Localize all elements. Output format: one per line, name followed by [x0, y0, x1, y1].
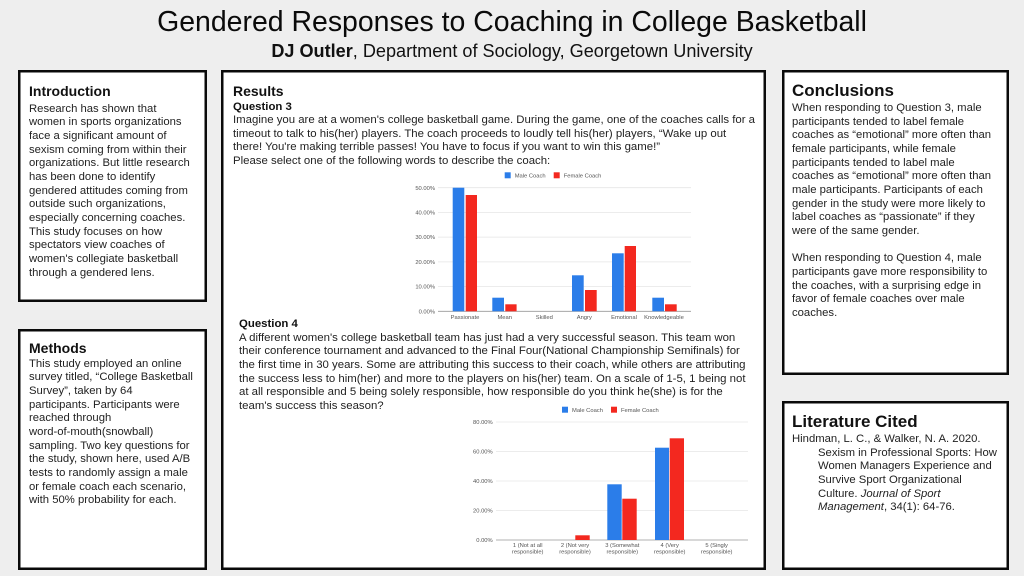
text: methods body: participants. Participants were: [29, 399, 180, 411]
text: introduction body: organizations. But little research: [29, 157, 190, 169]
text: citation: Culture. Journal of Sport: [818, 488, 940, 500]
text: question 3 prompt: there! You're making terrible passes! You have to focus if you want to win this game!”: [233, 141, 660, 153]
text: methods body: survey titled, “College Basketball: [29, 371, 193, 383]
y axis labels: 40.00%: [415, 210, 435, 216]
text: introduction body: spectators view coaches of: [29, 239, 165, 251]
text: conclusions body: female participants, while female: [792, 143, 956, 155]
y axis labels: [473, 420, 493, 544]
text: question 4 prompt: the success less to him(her) and more to the players on his(her) team. On a scale of 1-5, 1 being not: [239, 373, 746, 385]
panel: methods: [18, 329, 207, 570]
category labels: responsible): [512, 549, 544, 555]
text: conclusions body: male participants. Participants of each: [792, 184, 983, 196]
category labels: 3 (Somewhat: [605, 543, 640, 549]
category labels: 5 (Singly: [705, 543, 728, 549]
category labels: responsible): [559, 549, 591, 555]
female coach bars: [575, 438, 684, 540]
text: question 4 prompt: the first time in 30 years. Some are attributing this success to their coach, while others are attributing: [239, 359, 746, 371]
chart legend: Male Coach: [572, 408, 603, 414]
author and affiliation: DJ Outler, Department of Sociology, Georgetown University: [271, 41, 753, 61]
text: methods body: with 50% probability for each.: [29, 494, 177, 506]
text: citation: [792, 433, 997, 513]
y axis labels: 0.00%: [419, 309, 435, 315]
text: question 4 prompt: A different women's college basketball team has just had a very successful season. This team won: [239, 332, 735, 344]
text: introduction body: through a gendered lens.: [29, 267, 155, 279]
panel: results: [221, 70, 766, 570]
text: question 3 prompt: [233, 114, 755, 167]
text: conclusions body: the coaches, with a surprising edge in: [792, 280, 981, 292]
text: introduction body: gendered attitudes coming from: [29, 185, 188, 197]
category labels: Angry: [577, 315, 592, 321]
y axis labels: 0.00%: [476, 538, 493, 544]
category labels: [512, 543, 733, 555]
text: methods body: sampling. Two key questions for: [29, 440, 190, 452]
heading: results: Results: [233, 83, 284, 99]
text: conclusions body: participants tended to label female: [792, 116, 964, 128]
category labels: Passionate: [451, 315, 479, 321]
text: question 4 prompt: at all responsible and 5 being solely responsible, how responsible do you think he(she) is for the: [239, 386, 723, 398]
text: methods body: reached through: [29, 412, 111, 424]
text: question 3 prompt: Imagine you are at a women's college basketball game. During the game, one of the coaches calls for a: [233, 114, 755, 126]
y axis labels: 20.00%: [473, 509, 493, 515]
text: question 4 prompt: their conference tournament and advanced to the Final Four(National Championship Semifinals) for: [239, 345, 740, 357]
text: introduction body: women in sports organizations: [29, 116, 182, 128]
heading: conclusions: Conclusions: [792, 81, 894, 100]
chart legend: Female Coach: [564, 173, 601, 179]
category labels: Emotional: [611, 315, 637, 321]
text: conclusions body: gender in the study were more likely to: [792, 198, 985, 210]
male coach bars: [453, 188, 664, 311]
category labels: Mean: [497, 315, 512, 321]
text: introduction body: outside such organizations,: [29, 198, 166, 210]
text: conclusions body: coaches as “emotional” more often than: [792, 129, 991, 141]
text: citation: Hindman, L. C., & Walker, N. A. 2020.: [792, 433, 981, 445]
male coach bars: [607, 448, 669, 540]
gridlines and axis: [496, 422, 748, 540]
text: conclusions body: coaches.: [792, 307, 837, 319]
text: introduction body: especially concerning coaches.: [29, 212, 185, 224]
text: methods body: the study, shown here, used A/B: [29, 453, 190, 465]
panel: conclusions: [782, 70, 1009, 375]
category labels: Knowledgeable: [644, 315, 684, 321]
text: question 4 prompt: team's success this season?: [239, 400, 384, 412]
text: introduction body: sexism coming from within their: [29, 144, 187, 156]
category labels: responsible): [607, 549, 638, 555]
y axis labels: 80.00%: [473, 420, 493, 426]
text: introduction body: has been done to identify: [29, 171, 155, 183]
text: conclusions body: participants gave more responsibility to: [792, 266, 987, 278]
chart legend: Female Coach: [621, 408, 659, 414]
text: introduction body: face a significant amount of: [29, 130, 167, 142]
text: citation: Management, 34(1): 64-76.: [818, 501, 955, 513]
text: methods body: Survey”, taken by 64: [29, 385, 133, 397]
text: conclusions body: favor of female coaches over male: [792, 293, 965, 305]
chart legend: [505, 172, 601, 179]
bar chart: question 3 word choice by coach gender: [415, 172, 691, 321]
heading: question 3: Question 3: [233, 101, 292, 113]
heading: literature cited: Literature Cited: [792, 412, 918, 431]
text: conclusions body: When responding to Question 3, male: [792, 102, 982, 114]
text: citation: Survive Sport Organizational: [818, 474, 962, 486]
text: question 4 prompt: [239, 332, 746, 412]
text: citation: Sexism in Professional Sports: How: [818, 447, 997, 459]
heading: methods: Methods: [29, 340, 87, 356]
y axis labels: 30.00%: [415, 235, 435, 241]
text: methods body: word-of-mouth(snowball): [29, 426, 153, 438]
text: methods body: or female coach each scenario,: [29, 481, 186, 493]
y axis labels: 40.00%: [473, 479, 493, 485]
text: conclusions body: When responding to Question 4, male: [792, 252, 982, 264]
category labels: 1 (Not at all: [513, 543, 543, 549]
y axis labels: 20.00%: [415, 260, 435, 266]
category labels: [451, 315, 684, 321]
text: conclusions body: [792, 102, 991, 319]
y axis labels: 10.00%: [415, 285, 435, 291]
text: introduction body: [29, 102, 190, 279]
text: methods body: tests to randomly assign a male: [29, 467, 188, 479]
text: methods body: [29, 358, 193, 506]
text: introduction body: This study focuses on how: [29, 226, 162, 238]
heading: introduction: Introduction: [29, 83, 111, 99]
chart legend: Male Coach: [515, 173, 546, 179]
text: conclusions body: coaches as “emotional” more often than: [792, 170, 991, 182]
text: introduction body: Research has shown that: [29, 102, 156, 114]
category labels: 4 (Very: [661, 543, 679, 549]
bar chart: question 4 responsibility rating by coach gender: [473, 406, 748, 555]
text: conclusions body: label coaches as “passionate” if they: [792, 211, 975, 223]
gridlines and axis: [438, 188, 691, 311]
title: Gendered Responses to Coaching in College Basketball: [157, 6, 867, 38]
text: question 3 prompt: Please select one of the following words to describe the coach:: [233, 155, 550, 167]
female coach bars: [466, 195, 677, 311]
text: citation: Women Managers Experience and: [818, 460, 992, 472]
y axis labels: 50.00%: [415, 186, 435, 192]
y axis labels: [415, 186, 435, 315]
panel: literature cited: [782, 401, 1009, 570]
category labels: 2 (Not very: [561, 543, 589, 549]
text: conclusions body: participants tended to label male: [792, 157, 955, 169]
chart legend: [562, 407, 659, 414]
text: conclusions body: were of the same gender.: [792, 225, 919, 237]
heading: question 4: Question 4: [239, 318, 298, 330]
category labels: Skilled: [536, 315, 553, 321]
text: introduction body: women's collegiate basketball: [29, 253, 178, 265]
text: methods body: This study employed an online: [29, 358, 182, 370]
y axis labels: 60.00%: [473, 450, 493, 456]
text: question 3 prompt: timeout to talk to his(her) players. The coach proceeds to loudly tell his(her) players, “Wake up out: [233, 128, 726, 140]
category labels: responsible): [701, 549, 733, 555]
panel: introduction: [18, 70, 207, 302]
category labels: responsible): [654, 549, 686, 555]
